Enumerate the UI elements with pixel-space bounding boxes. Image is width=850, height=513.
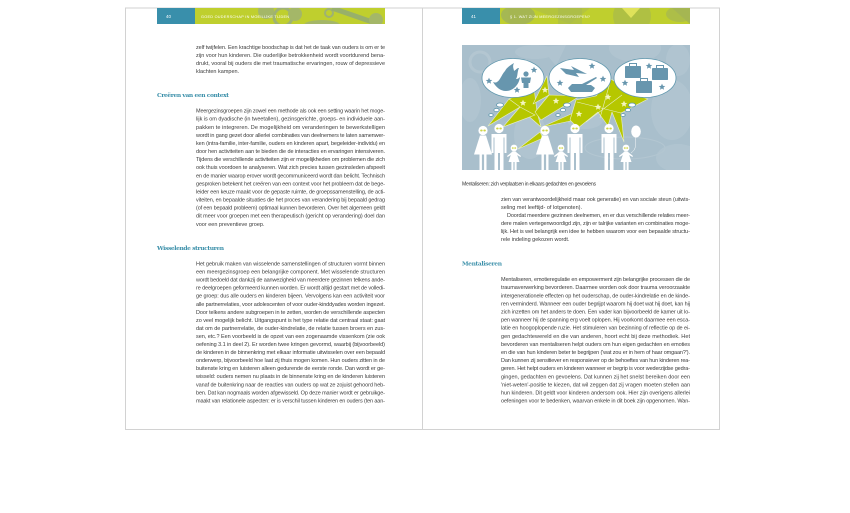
body text: Creëren van een context: door hen activiteiten aan te bieden die de interacties en ervaringen intensiveren. xyxy=(196,149,385,155)
body text: Wisselende structuren: een meergezinsgroep een belangrijke component. Met wisselende structuren xyxy=(196,270,385,276)
thought bubbles xyxy=(482,58,676,116)
body text: Wisselende structuren: onderwerp, bijvoorbeeld hoe laat zij thuis mogen komen. Hun ouders zitten in de xyxy=(196,358,385,364)
heading: Wisselende structuren: Wisselende structuren xyxy=(156,245,225,252)
body text: Creëren van een context: pakken te integreren. De mogelijkheid om veranderingen te bewerkstelligen xyxy=(196,125,385,131)
body text: Creëren van een context: en de manier waarop erover wordt gecommuniceerd wordt dan belicht. Technisch xyxy=(196,173,385,179)
body text: Wisselende structuren: alle partnerrelaties, voor adolescenten of voor ouder-kinddyades worden ingezet. xyxy=(196,302,385,308)
body text: Creëren van een context: (of een bepaald probleem) optimaal kunnen bevorderen. Over het algemeen geldt xyxy=(196,206,385,212)
body text: continuation on right page xyxy=(501,197,690,243)
body text: Creëren van een context: gesproken betekent het creëren van een context voor het probleem dat de bege- xyxy=(196,181,385,187)
body text: Creëren van een context: dit meer voor groepen met een therapeutisch (gericht op verandering) doel dan xyxy=(196,214,385,220)
body text: opening paragraph xyxy=(196,45,385,75)
body text: opening paragraph: zelf twijfelen. Een krachtige boodschap is dat het de taak van ouders is om er te xyxy=(196,45,385,51)
figures: first family xyxy=(474,124,521,170)
body text: Mentaliseren: oefeningen voor te bedenken, waarvan enkele in dit boek zijn opgenomen. Wan- xyxy=(501,399,690,405)
body text: Wisselende structuren: dat om de partnerrelatie, de ouder-kindrelatie, de relatie tussen broers en zus- xyxy=(196,326,385,332)
body text: Creëren van een context: wordt in gang gezet door allerlei combinaties van deelnemers te laten samenwer- xyxy=(195,133,385,139)
body text: Mentaliseren: Mentaliseren, emotieregulatie en empowerment zijn belangrijke processen die de xyxy=(501,277,690,283)
body text: Creëren van een context: Meergezinsgroepen zijn zowel een methode als ook een setting waarin het moge- xyxy=(196,109,385,115)
body text: continuation on right page: rele indeling gekozen wordt. xyxy=(501,237,570,243)
body text: Mentaliseren: geren. Het helpt ouders en kinderen wanneer er begrip is voor wederzijdse gedra- xyxy=(501,366,690,372)
icon: suitcases and stars xyxy=(622,63,668,93)
body text: Wisselende structuren: wordt bedoeld dat dankzij de aanwezigheid van meerdere gezinnen telkens ande- xyxy=(195,278,385,284)
stars on rays xyxy=(520,87,627,117)
body text: Creëren van een context: voor een preventieve groep. xyxy=(196,222,265,228)
body text: Wisselende structuren: oefening 3.1 in deel 2). Er worden twee kringen gevormd, waarbij (bijvoorbeeld) xyxy=(196,342,385,348)
body text: Creëren van een context: ken (intra-familie, inter-familie, ouders en kinderen apart, begeleider-individu) en xyxy=(196,141,385,147)
body text: Creëren van een context: Tijdens die verschillende activiteiten zijn er mogelijkheden om problemen die zich xyxy=(196,157,385,163)
header band: right page xyxy=(462,8,690,24)
body text: Wisselende structuren xyxy=(195,262,385,404)
body text: continuation on right page: Doordat meerdere gezinnen deelnemen, en er dus verschillende relaties meer- xyxy=(507,213,690,219)
running head: § 1. WAT ZIJN MEERGEZINSGROEPEN? xyxy=(510,15,590,19)
illustration: families sharing thoughts in speech bubbles xyxy=(462,45,690,170)
body text: Mentaliseren: latie en hoogoplopende ruzie. Het stimuleren van bezinning of reflectie op de ei- xyxy=(501,326,690,332)
body text: Wisselende structuren: buitenste kring en luisteren alleen gedurende de eerste ronde. Dan wordt er ge- xyxy=(196,366,385,372)
body text: Mentaliseren: traumaverwerking bevorderen. Daarmee worden ook door trauma veroorzaakte xyxy=(501,285,690,291)
body text: Mentaliseren: ren verminderd. Wanneer een ouder begrijpt waarom hij doet wat hij doet, kan hij xyxy=(501,301,690,307)
figures: second family xyxy=(536,124,582,170)
body text: Mentaliseren: gingen, gedachten en gevoelens. Dat kunnen zij het snelst bereiken door een xyxy=(501,374,690,380)
body text: opening paragraph: drukt, vooral bij ouders die met traumatische ervaringen, rouw of depressieve xyxy=(196,61,385,67)
body text: continuation on right page: dere malen vertegenwoordigd zijn, zijn er talrijke varianten en combinaties moge- xyxy=(501,221,690,227)
body text: Wisselende structuren: de kinderen in de binnenkring met elkaar informatie uitwisselen over een bepaald xyxy=(196,350,385,356)
body text: Wisselende structuren: Het gebruik maken van wisselende samenstellingen of structuren vormt binnen xyxy=(196,262,385,268)
body text: Mentaliseren: pen wanneer hij de spanning erg voelt oplopen. Hij voorkomt daarmee een esca- xyxy=(501,318,690,324)
body text: Mentaliseren: Dan kunnen zij sensitiever en responsiever op de behoeftes van hun kinderen rea- xyxy=(501,358,690,364)
body text: Wisselende structuren: wisseld: ouders nemen nu plaats in de binnenste kring en de kinderen luisteren xyxy=(195,374,385,380)
page number 40: 40 xyxy=(166,14,171,19)
heading: Creëren van een context: Creëren van een context xyxy=(157,92,229,99)
body text: Wisselende structuren: maakt van relationele aspecten: er is verschil tussen kinderen en ouders (ten aan- xyxy=(196,398,385,404)
page number 41: 41 xyxy=(471,14,476,19)
body text: continuation on right page: zien van verantwoordelijkheid maar ook generatie) en van sociale steun (uitwis- xyxy=(501,197,690,203)
body text: Mentaliseren: hun kinderen. Dit geldt voor kinderen andersom ook. Hier zijn overigens allerlei xyxy=(501,390,690,396)
body text: Wisselende structuren: ge groep: dus alle ouders en kinderen bijeen. Vervolgens kan een activiteit voor xyxy=(196,294,385,300)
body text: Mentaliseren: bevorderen van mentaliseren helpt ouders om hun eigen gedachten en emoties xyxy=(501,342,690,348)
body text: Mentaliseren: intergenerationele effecten op het ouderschap, de ouder-kindrelatie en de kinde- xyxy=(501,293,690,299)
illustration background xyxy=(462,45,690,170)
body text: Creëren van een context xyxy=(195,109,385,228)
icon: lightning, tank and stars xyxy=(557,63,606,92)
page frame: left and right pages xyxy=(126,8,720,430)
body text: opening paragraph: zijn voor hun kinderen. Die ouderlijke betrokkenheid wordt voortdurend bena- xyxy=(196,53,385,59)
body text: Creëren van een context: lijk is om dyadische (in tweetallen), gezinsgerichte, groeps- en individuele aan- xyxy=(196,117,385,123)
running head: GOED OUDERSCHAP IN MOEILIJKE TIJDEN xyxy=(201,15,289,19)
header band: left page xyxy=(157,8,385,24)
heading: Mentaliseren: Mentaliseren xyxy=(462,261,503,268)
body text: Wisselende structuren: vanaf de buitenkring naar de reacties van ouders op wat ze zojuist gehoord heb- xyxy=(196,382,385,388)
body text: Mentaliseren: zich inzetten om het anders te doen. Een vader kan bijvoorbeeld de kamer uit lo- xyxy=(501,310,690,316)
body text: continuation on right page: seling met leeftijd- of lotgenoten). xyxy=(501,205,582,211)
body text: Wisselende structuren: re deelgroepen geformeerd kunnen worden. Er wordt altijd gestart met de volledi- xyxy=(196,286,385,292)
body text: Wisselende structuren: sen, etc.? Een voorbeeld is de opzet van een zogenaamde vissenkom (zie ook xyxy=(196,334,385,340)
body text: Creëren van een context: viteiten, en bepaalde situaties die het proces van verandering bij bepaald gedrag xyxy=(196,198,385,204)
body text: Wisselende structuren: ben. Dat kan nogmaals worden afgewisseld. Op deze manier wordt er gebruikge- xyxy=(196,390,385,396)
body text: Mentaliseren: gen gedachtewereld en die van anderen, hoort echt bij deze methodiek. Het xyxy=(501,334,690,340)
body text: opening paragraph: klachten kampen. xyxy=(196,69,240,75)
body text: continuation on right page: lijk. Het is wel belangrijk een idee te hebben waarom voor een bepaalde structu- xyxy=(501,229,690,235)
body text: Mentaliseren: 'niet-weten'-positie te kiezen, dat wil zeggen dat zij vragen moeten stellen aan xyxy=(501,382,690,388)
icon: flame and person xyxy=(486,63,537,93)
body text: Creëren van een context: ook thuis voordoen te analyseren. Wat zich precies tussen gezinsleden afspeelt xyxy=(196,165,385,171)
body text: Wisselende structuren: zo veel mogelijk belicht. Uitgangspunt is het type relatie dat centraal staat: gaat xyxy=(196,318,385,324)
caption: Mentaliseren: zich verplaatsen in elkaars gedachten en gevoelens xyxy=(462,181,596,187)
body text: Mentaliseren: en die van hun kinderen beter te begrijpen ('wat zou er in hem of haar omgaan?'). xyxy=(501,350,690,356)
body text: Wisselende structuren: Door telkens andere subgroepen in te zetten, worden de verschillende aspecten xyxy=(196,310,385,316)
figures: third family with balloon xyxy=(602,124,641,170)
green thought rays xyxy=(488,76,648,149)
body text: Mentaliseren xyxy=(501,277,690,405)
body text: Creëren van een context: leider een keuze maakt voor de gepaste ruimte, de groepssamenstelling, de acti- xyxy=(196,190,385,196)
